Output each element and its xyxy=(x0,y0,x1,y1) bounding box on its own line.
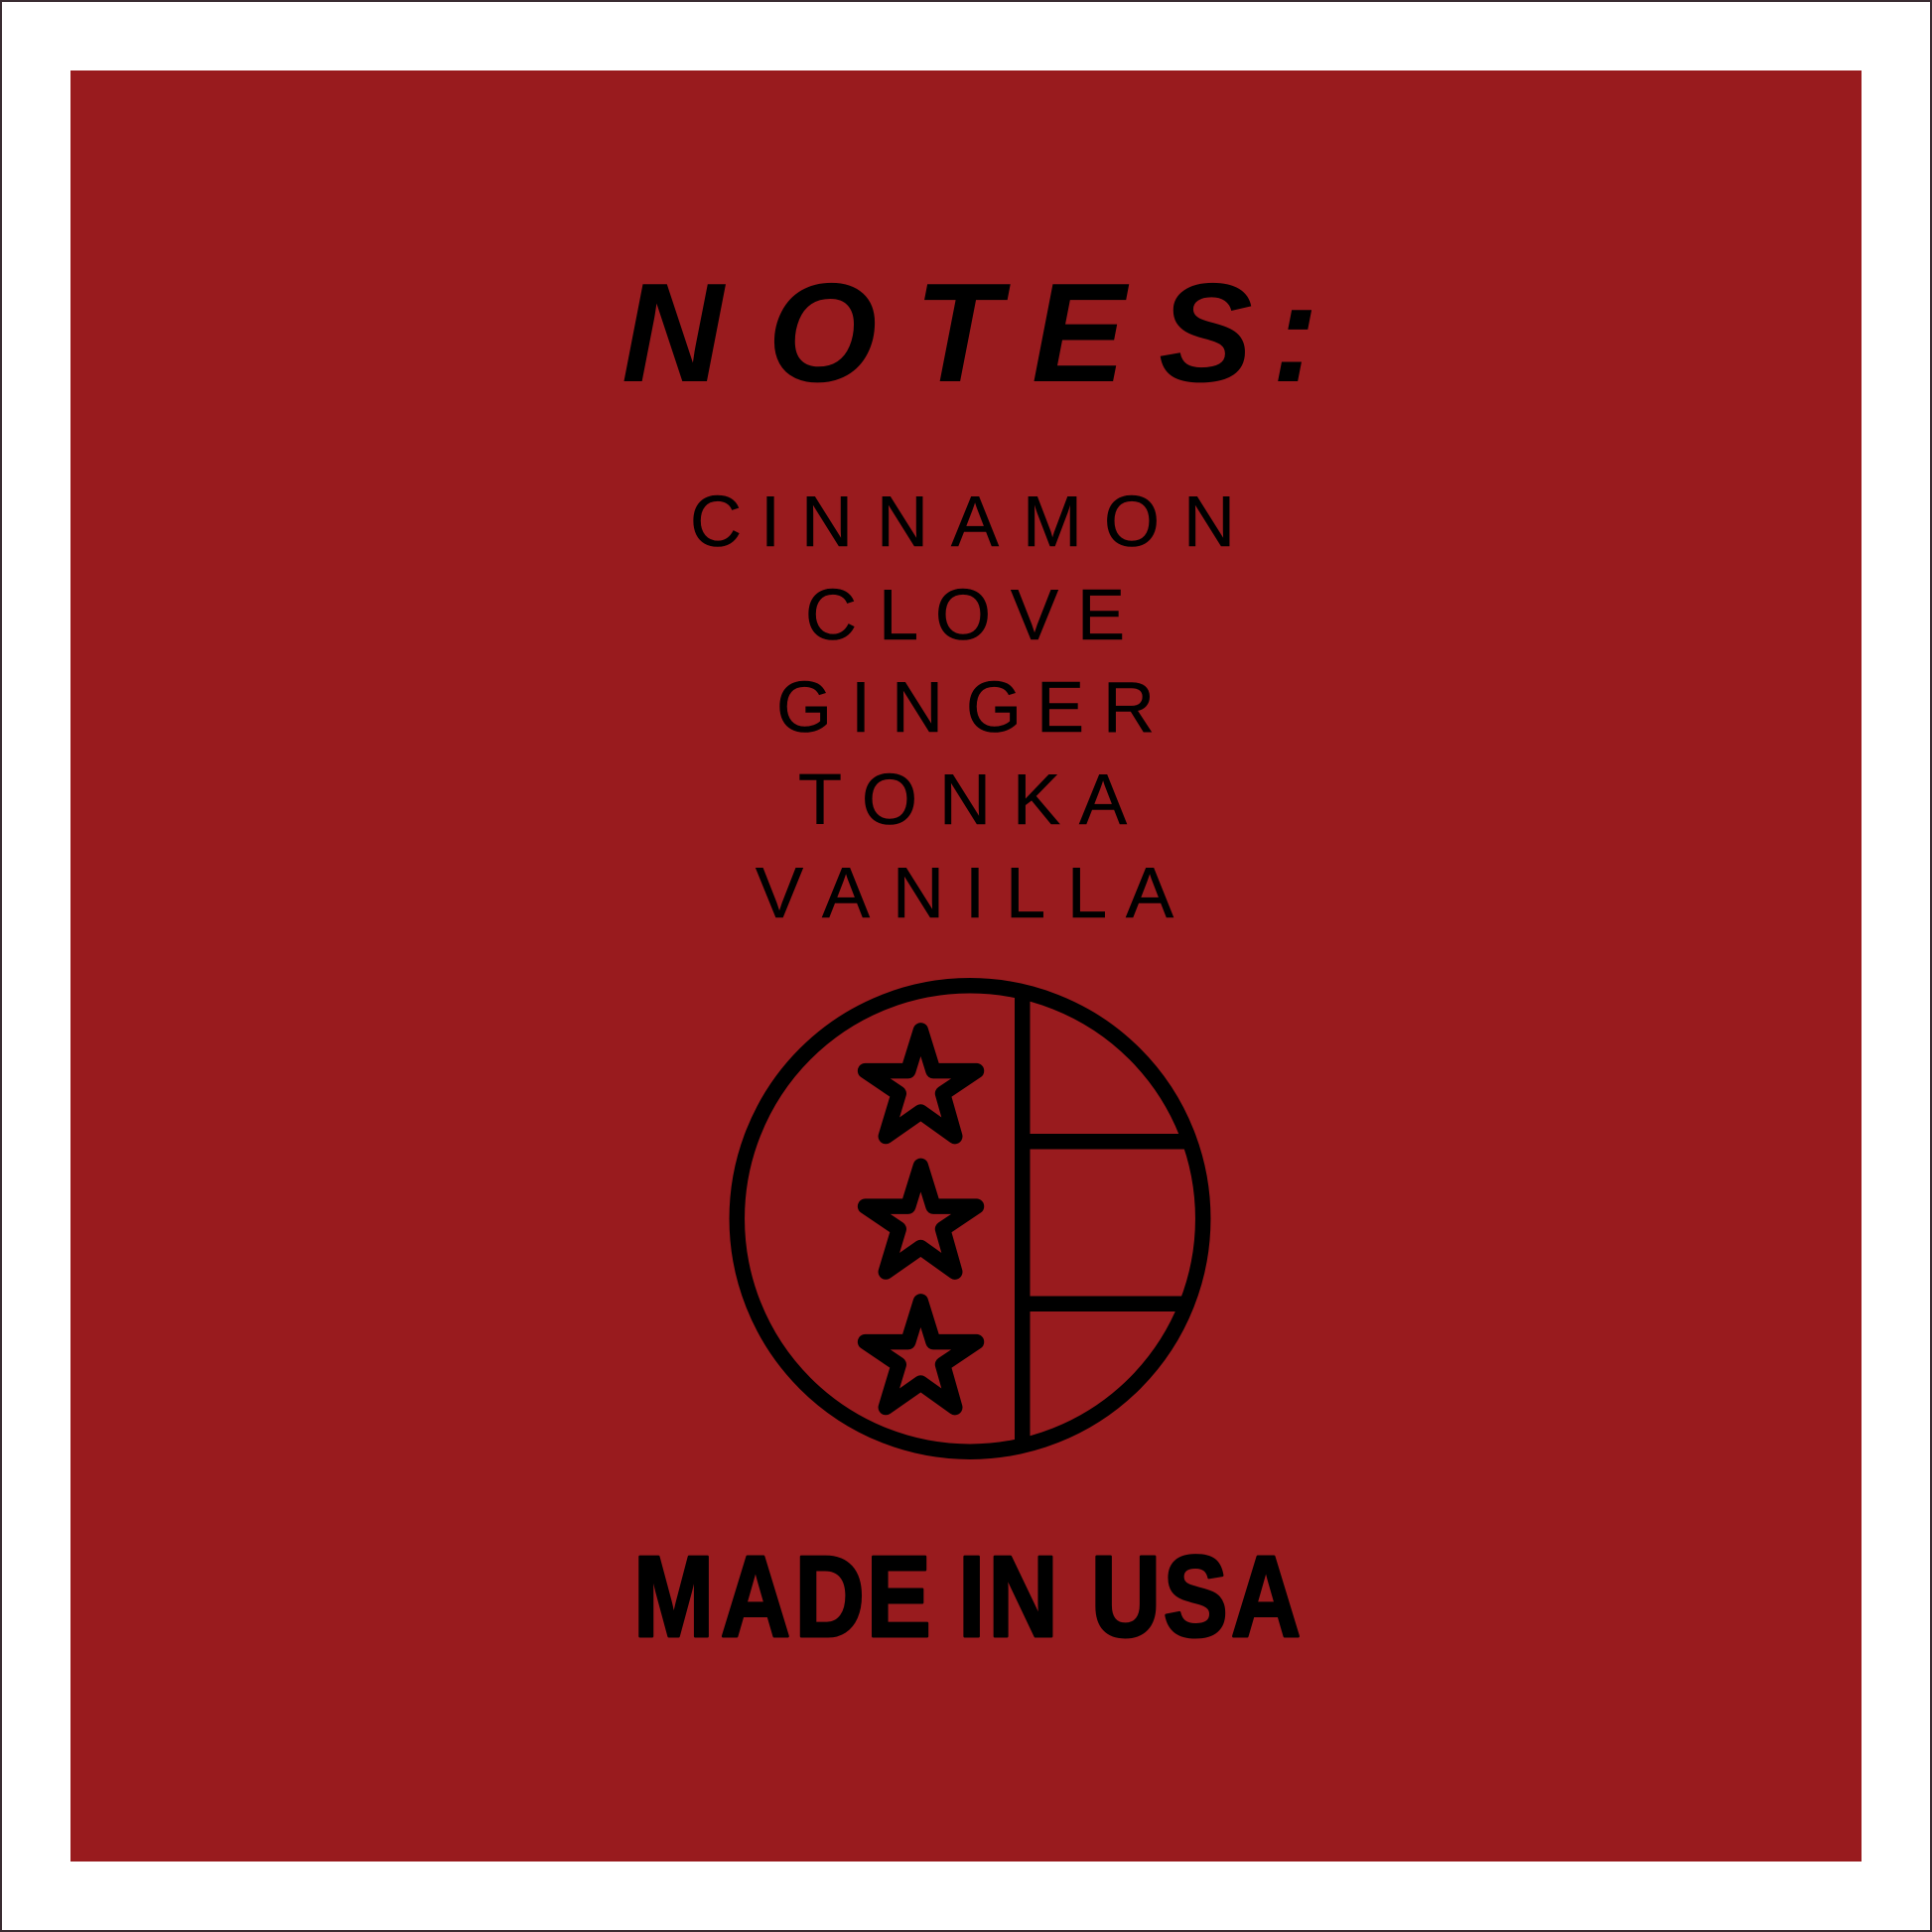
note: vanilla: VANILLA xyxy=(756,854,1173,933)
note: cinnamon: CINNAMON xyxy=(690,483,1235,562)
label: made in usa: MADE IN USA xyxy=(633,1532,1301,1661)
note: clove: CLOVE xyxy=(805,576,1125,655)
text block: list of notes xyxy=(690,483,1235,933)
heading: notes: NOTES: xyxy=(621,254,1318,412)
icon: circular usa flag xyxy=(737,986,1203,1451)
note: ginger: GINGER xyxy=(776,668,1155,748)
note: tonka: TONKA xyxy=(798,760,1127,840)
